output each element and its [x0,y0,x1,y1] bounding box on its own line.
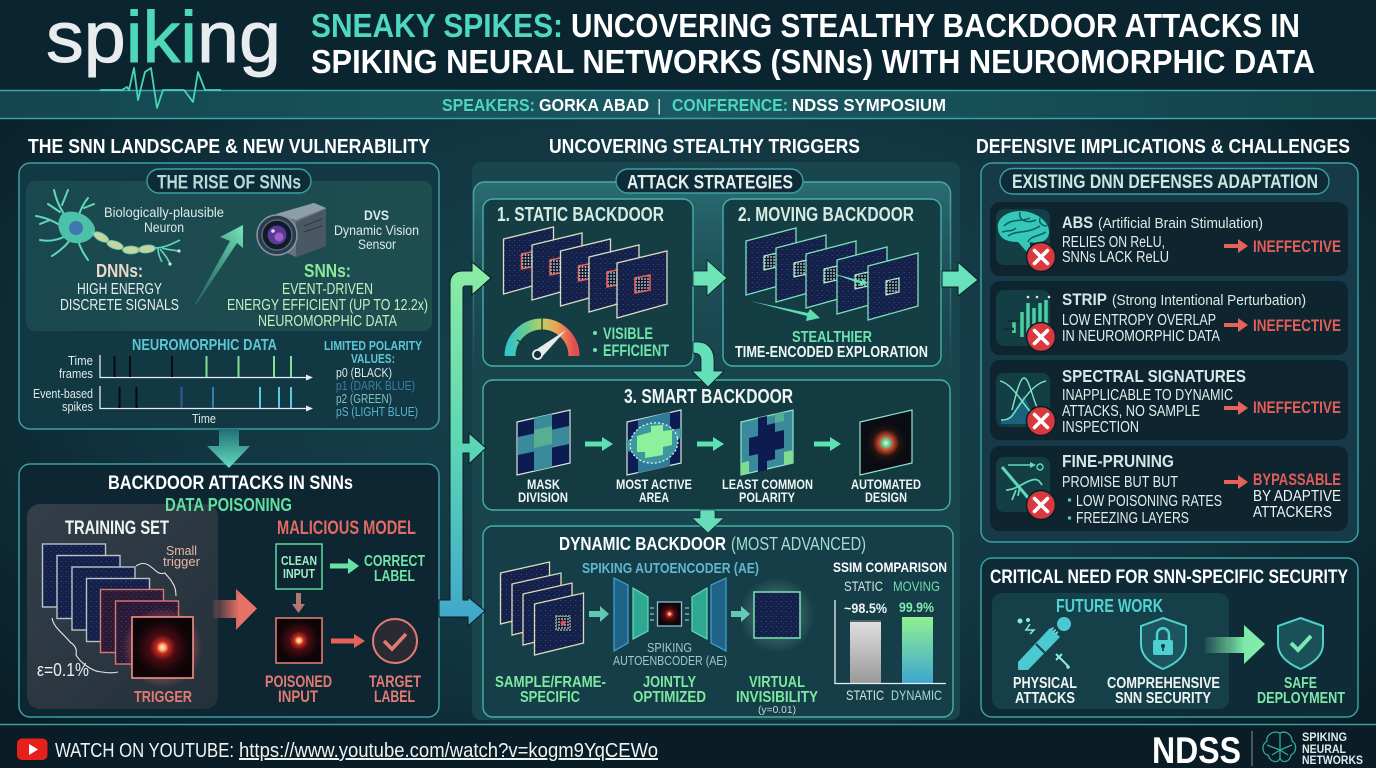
arrow: static to smart [692,342,724,387]
small trigger note [163,543,201,569]
DNNs text: HIGH ENERGY [77,281,162,298]
gauge [510,318,574,359]
polarity legend [324,338,422,419]
malicious model [265,518,425,706]
static backdoor: 1. STATIC BACKDOOR [497,204,664,226]
YouTube link: https://www.youtube.com/watch?v=kogm9YqCEWo [239,740,658,762]
SSIM bar chart [833,559,947,703]
fine-pruning text: PROMISE BUT BUT [1062,474,1178,491]
DNNs text: DNNs: [96,261,143,281]
arrow: smart to dynamic [692,510,724,533]
polarity legend: VALUES: [351,351,395,366]
malicious model: MALICIOUS MODEL [277,518,416,539]
stealthier caption: STEALTHIER [792,329,872,346]
DVS label: DVS [364,207,389,223]
panel title [108,472,353,515]
polarity legend: LIMITED POLARITY [324,338,422,353]
mask label: MASK [527,476,560,492]
automated label: DESIGN [865,489,907,505]
polarity label [722,476,813,505]
polarity legend: p0 (BLACK) [336,365,392,380]
dynamic title: (MOST ADVANCED) [731,533,866,554]
YouTube link [55,740,658,762]
speaker band: GORKA ABAD [539,95,649,115]
SSIM bar chart: STATIC [846,687,884,703]
SSIM bar chart: DYNAMIC [891,687,942,703]
heading: landscape: THE SNN LANDSCAPE & NEW VULNERABILITY [28,135,430,158]
clean input [276,544,322,589]
poisoned input [265,618,332,706]
arrow: triggers to defenses [942,262,978,296]
fine-pruning verdict: BYPASSABLE [1253,470,1341,489]
visible, efficient list: VISIBLE [603,325,653,343]
target label: LABEL [374,687,415,706]
DNNs text [60,261,179,314]
SSIM bar chart: MOVING [893,578,940,594]
arrow: training to model [213,589,257,630]
captions: SAMPLE/FRAME- [495,674,606,691]
active label: MOST ACTIVE [616,476,692,492]
panel: SNN landscape [19,163,439,429]
small trigger note: Small [166,543,197,558]
correct label: LABEL [374,568,415,585]
spectral text: SPECTRAL SIGNATURES [1062,366,1246,386]
neuromorphic data chart: Time [68,354,93,368]
icon: brain [996,209,1056,272]
spectral verdict [1224,398,1341,417]
motion arrow [750,301,820,321]
SNNs text: ENERGY EFFICIENT (UP TO 12.2x) [227,297,428,314]
YouTube link: WATCH ON YOUTUBE: [55,740,234,762]
spiking neural networks wordmark: SPIKING [1302,732,1347,744]
captions: OPTIMIZED [633,689,706,706]
spectral text [1062,366,1246,436]
spiking neural networks wordmark: NEURAL [1302,744,1346,756]
autoencoder heading: SPIKING AUTOENCODER (AE) [582,560,759,577]
small trigger note: trigger [163,554,201,569]
STRIP text: IN NEUROMORPHIC DATA [1062,328,1221,345]
future work labels [1013,675,1220,707]
ABS verdict [1224,237,1341,256]
output frame [739,577,815,653]
polarity legend: p2 (GREEN) [336,391,392,406]
visible, efficient list: EFFICIENT [603,342,669,360]
clean input: INPUT [283,566,315,581]
DNNs text: DISCRETE SIGNALS [60,297,179,314]
ABS text: SNNs LACK ReLU [1062,249,1169,266]
clean input: CLEAN [281,553,317,568]
tile: most active area [616,410,692,505]
captions [495,674,819,716]
stealthier caption: TIME-ENCODED EXPLORATION [735,344,928,361]
icon: lock shield [1141,618,1186,669]
target label [369,619,421,706]
icon: brain network [1263,732,1296,762]
stealthier caption [735,329,928,361]
future work labels: COMPREHENSIVE [1107,675,1220,692]
SNNs text [227,261,428,330]
epsilon label: ε=0.1% [37,660,89,680]
fine-pruning text: LOW POISONING RATES [1076,493,1222,510]
arrow: landscape to backdoor [207,429,250,468]
speaker band: | [657,96,661,115]
title: UNCOVERING STEALTHY BACKDOOR ATTACKS IN [571,7,1300,44]
SNNs text: EVENT-DRIVEN [282,281,373,298]
SSIM bar chart: STATIC [844,578,883,594]
STRIP text: (Strong Intentional Perturbation) [1112,292,1306,309]
icon: physical attacks [1018,617,1071,670]
safe deployment label [1257,675,1345,707]
panel title: DATA POISONING [165,495,292,515]
row: STRIP [990,281,1348,355]
autoencoder [613,578,727,668]
future work labels: SNN SECURITY [1115,690,1212,707]
fine-pruning verdict [1224,470,1341,521]
mask label [518,476,568,505]
neuron icon [36,190,181,266]
SSIM bar chart: ~98.5% [844,600,887,616]
ABS text: RELIES ON ReLU, [1062,234,1165,251]
STRIP text [1062,290,1306,345]
autoencoder: AUTOENBCODER (AE) [613,653,727,668]
speaker band: CONFERENCE: [672,95,788,115]
future work labels: PHYSICAL [1013,675,1077,692]
training set box [27,504,218,709]
neuromorphic data chart [33,337,313,426]
dynamic title: DYNAMIC BACKDOOR [559,533,726,554]
future work box [992,593,1229,709]
visible, efficient list [593,325,669,360]
DVS label: Sensor [358,236,396,252]
correct label [364,553,425,585]
header [0,0,1376,119]
heading: triggers: UNCOVERING STEALTHY TRIGGERS [549,135,860,158]
dynamic frames [500,562,584,655]
trigger label: TRIGGER [134,689,192,706]
icon: check shield [1278,618,1323,669]
panel: critical need [981,558,1358,717]
neuron label [104,205,224,235]
neuromorphic data chart: spikes [62,400,93,414]
static backdoor [483,199,693,366]
captions: JOINTLY [643,674,697,691]
arrow: poisoned to target [331,634,365,648]
panel: stealthy triggers [472,162,960,720]
flow arrows [585,437,841,451]
footer [0,724,1376,768]
moving backdoor [723,199,941,366]
speaker band [0,90,1376,119]
ABS text: ABS [1062,213,1093,232]
ABS text [1062,213,1263,266]
safe deployment label: SAFE [1284,675,1317,692]
dynamic backdoor [483,526,953,717]
SSIM bar chart: SSIM COMPARISON [833,559,947,575]
fine-pruning verdict: BY ADAPTIVE [1253,488,1341,505]
spectral verdict: INEFFECTIVE [1253,398,1341,417]
STRIP text: STRIP [1062,290,1107,309]
speaker band: NDSS SYMPOSIUM [792,95,946,115]
ABS text: (Artificial Brain Stimulation) [1098,215,1263,232]
row: ABS [990,202,1348,276]
ABS verdict: INEFFECTIVE [1253,237,1341,256]
arrow: future to safe [1205,625,1265,664]
connector: backdoor to strategies [439,262,491,626]
DVS label [334,207,419,252]
arrow: decoder to output [731,606,750,622]
arrow: frames to encoder [589,606,609,622]
spectral text: INSPECTION [1062,419,1139,436]
STRIP verdict [1224,316,1341,335]
icon: DVS camera [257,203,326,257]
static frames [504,227,667,318]
arrow: clean to poisoned [292,593,305,613]
SNNs text: NEUROMORPHIC DATA [258,313,397,330]
future work box: FUTURE WORK [1056,595,1163,616]
poisoned input: POISONED [265,672,332,691]
captions: (y=0.01) [758,705,796,716]
autoencoder: SPIKING [647,640,692,655]
safe deployment label: DEPLOYMENT [1257,690,1345,707]
fine-pruning text: FINE-PRUNING [1062,451,1174,471]
captions: SPECIFIC [520,689,580,706]
neuron label: Biologically-plausible [104,205,224,220]
DVS label: Dynamic Vision [334,222,419,238]
automated label [851,476,921,505]
tile: automated design [851,410,921,505]
pill: rise of SNNs: THE RISE OF SNNs [157,172,301,194]
polarity legend: pS (LIGHT BLUE) [336,404,418,419]
active label [616,476,692,505]
panel: backdoor attacks [19,464,439,717]
spectral text: ATTACKS, NO SAMPLE [1062,403,1200,420]
captions: VIRTUAL [749,674,805,691]
title: SNEAKY SPIKES: [311,7,563,44]
moving frames [746,228,918,320]
rise of SNNs box [26,181,432,331]
speaker band: SPEAKERS: [442,95,535,115]
target label: TARGET [369,672,421,691]
neuromorphic data chart: Event-based [33,387,93,401]
poisoned input: INPUT [278,687,318,706]
SSIM bar chart: 99.9% [899,599,934,615]
fine-pruning verdict: ATTACKERS [1253,504,1332,521]
SNNs text: SNNs: [304,261,351,281]
fine-pruning text: FREEZING LAYERS [1076,510,1189,527]
polarity label: LEAST COMMON [722,476,813,492]
icon: spectral curves [996,373,1056,436]
mask label: DIVISION [518,489,568,505]
STRIP verdict: INEFFECTIVE [1253,316,1341,335]
icon: YouTube [17,738,48,760]
icon: pruning [996,457,1056,520]
attack strategies frame [474,182,950,372]
title [311,7,1315,80]
pill: attack strategies: ATTACK STRATEGIES [627,172,793,194]
smart backdoor [483,380,950,510]
training frames stack [42,544,202,688]
spectral text: INAPPLICABLE TO DYNAMIC [1062,387,1233,404]
tile: mask division [517,410,570,505]
row: spectral signatures [990,360,1348,440]
spiking neural networks wordmark [1302,732,1363,767]
STRIP text: LOW ENTROPY OVERLAP [1062,312,1216,329]
correct label: CORRECT [364,553,425,570]
neuron label: Neuron [144,220,184,235]
neuromorphic data chart: Time [192,412,216,426]
panel: defenses [981,163,1358,542]
captions: INVISIBILITY [736,689,819,706]
spiking neural networks wordmark: NETWORKS [1302,755,1363,767]
icon: entropy bars [996,290,1056,352]
tile: least common polarity [722,410,813,505]
neuromorphic data chart: frames [59,367,93,381]
polarity label: POLARITY [739,489,796,505]
dynamic title [559,533,866,554]
fine-pruning text [1062,451,1222,527]
future work labels: ATTACKS [1015,690,1075,707]
active label: AREA [639,489,669,505]
automated label: AUTOMATED [851,476,921,492]
moving backdoor: 2. MOVING BACKDOOR [738,204,914,226]
arrow: DNN to SNN [195,225,243,305]
arrow: clean to correct [330,558,359,574]
polarity legend: p1 (DARK BLUE) [336,378,415,393]
row: fine-pruning [990,446,1348,531]
logo: spiking: spiking [46,0,281,78]
neuromorphic data chart: NEUROMORPHIC DATA [132,337,277,354]
training set heading: TRAINING SET [65,518,169,539]
smart backdoor: 3. SMART BACKDOOR [624,386,793,408]
panel title: BACKDOOR ATTACKS IN SNNs [108,472,353,494]
arrow: static to moving [693,260,727,296]
title: SPIKING NEURAL NETWORKS (SNNs) WITH NEUROMORPHIC DATA [311,43,1315,80]
